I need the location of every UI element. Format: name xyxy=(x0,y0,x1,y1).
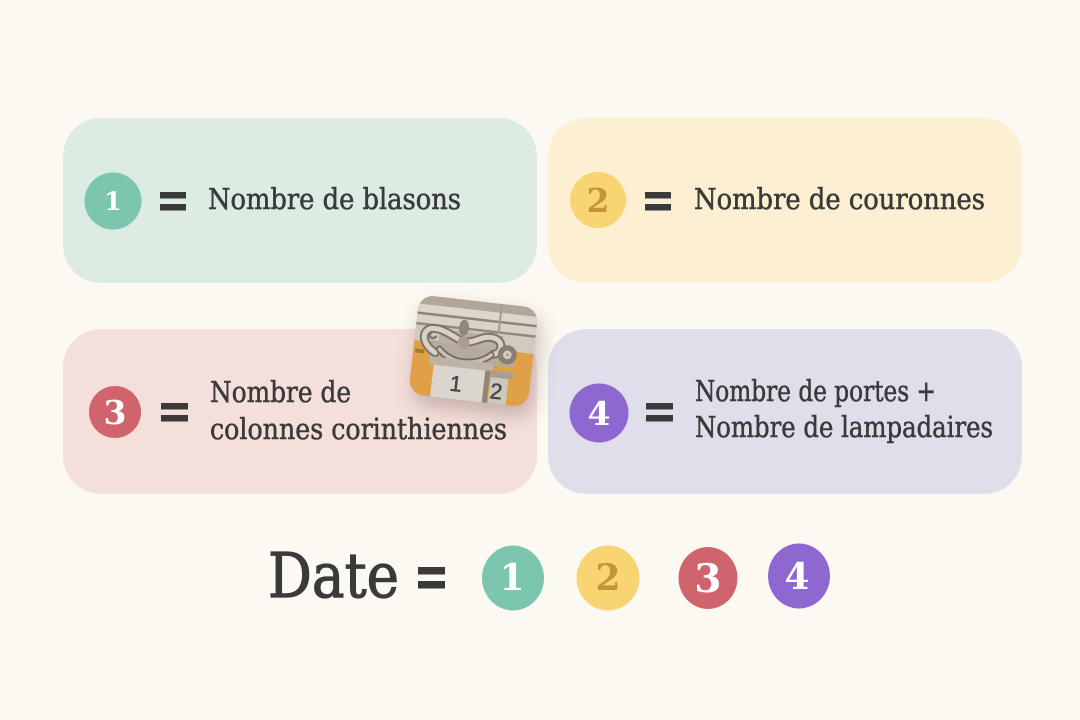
panel: 1 blasons xyxy=(63,118,537,283)
badge 4 xyxy=(570,384,628,442)
panel: 4 portes et lampadaires xyxy=(548,329,1022,494)
equals sign xyxy=(161,403,188,422)
badge 2 xyxy=(570,172,626,228)
equals sign xyxy=(646,403,673,422)
photo: corinthian capital with numbers 1 and 2 xyxy=(408,295,539,409)
pedestal numbers: 1 xyxy=(448,371,463,397)
pedestal numbers xyxy=(450,376,502,400)
formula badge 1 xyxy=(482,546,544,610)
formula badge 3 xyxy=(678,547,738,609)
formula badge 3: 3 xyxy=(694,556,722,602)
formula badge 1: 1 xyxy=(499,557,525,599)
formula badge 4: 4 xyxy=(784,556,810,598)
formula: Date = 1 2 3 4 xyxy=(268,539,830,612)
badge 2: 2 xyxy=(587,181,609,220)
label: Nombre de couronnes: Nombre de couronnes xyxy=(694,182,985,216)
badge 3 xyxy=(89,386,141,438)
photo shadow xyxy=(412,305,542,417)
heading: Date =: Date xyxy=(268,539,399,612)
badge 1 xyxy=(84,172,142,230)
badge 3: 3 xyxy=(104,393,126,432)
pedestal numbers: 2 xyxy=(489,378,504,404)
formula badge 2: 2 xyxy=(595,557,621,599)
capital scrolls xyxy=(422,327,516,368)
panel: 3 colonnes xyxy=(63,329,537,494)
label: Nombre de portes + Nombre de lampadaires: Nombre de lampadaires xyxy=(695,410,993,444)
formula badge 2 xyxy=(576,546,640,610)
capital body behind scrolls xyxy=(428,340,515,368)
label: Nombre de colonnes corinthiennes: colonnes corinthiennes xyxy=(210,412,507,446)
pedestal 2 xyxy=(488,370,513,380)
label: Nombre de portes + Nombre de lampadaires xyxy=(695,374,993,444)
badge 4: 4 xyxy=(588,394,610,433)
panel: 2 couronnes xyxy=(548,118,1022,283)
label: Nombre de portes + Nombre de lampadaires: Nombre de portes + xyxy=(695,374,936,408)
label: Nombre de colonnes corinthiennes xyxy=(210,375,507,446)
label: Nombre de colonnes corinthiennes: Nombre de xyxy=(210,375,351,409)
badge 1: 1 xyxy=(104,187,122,216)
label: Nombre de blasons: Nombre de blasons xyxy=(208,182,461,216)
equals sign xyxy=(160,192,186,210)
pedestal 1 xyxy=(429,356,493,371)
formula badge 4 xyxy=(768,544,830,608)
equals sign xyxy=(645,192,671,210)
